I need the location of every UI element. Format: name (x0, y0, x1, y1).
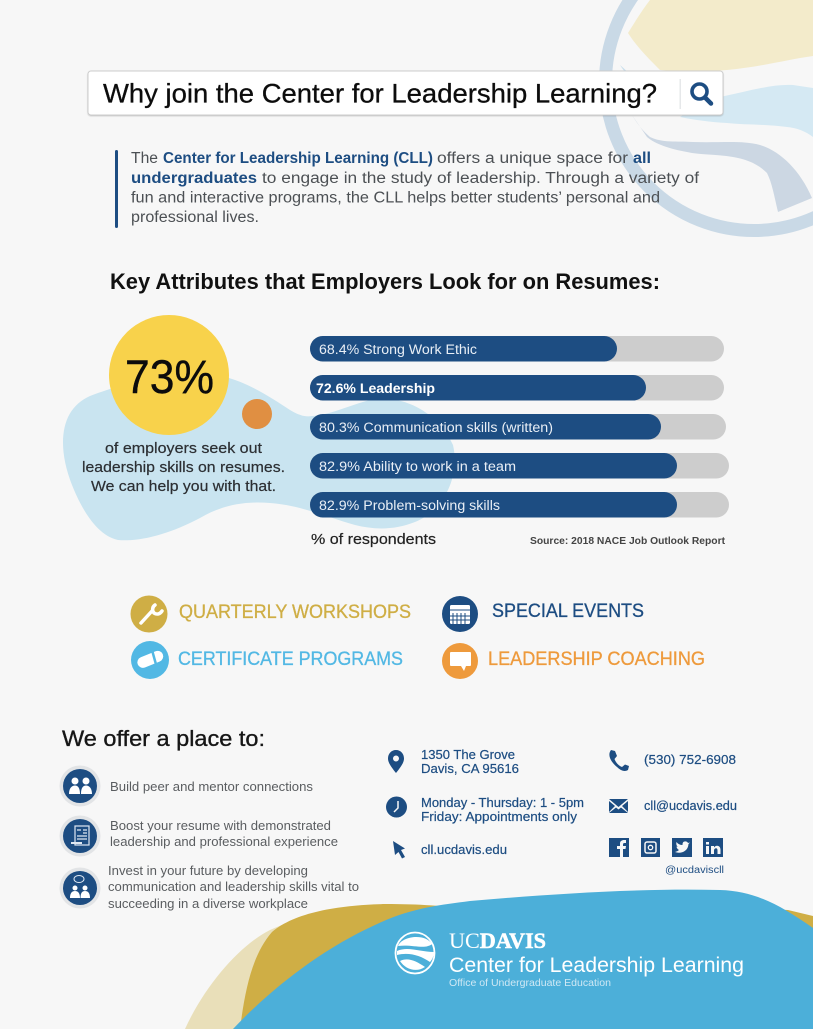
center name: Center for Leadership Learning (449, 954, 744, 977)
icon: linkedin (703, 838, 723, 857)
contact: email: cll@ucdavis.edu (644, 799, 737, 813)
icon: instagram (641, 838, 660, 857)
contact: address: 1350 The Grove (421, 748, 515, 762)
decorative logo shapes: top right (606, 0, 813, 230)
offer: invest in future (60, 864, 359, 911)
offer: peer connections: Build peer and mentor connections (110, 780, 313, 794)
blue blob background (63, 372, 455, 540)
contact: phone (609, 750, 736, 771)
contact: hours: Friday: Appointments only (421, 810, 578, 824)
intro paragraph: fun and interactive programs, the CLL helps better students’ personal and (131, 190, 660, 206)
contact: hours: Monday - Thursday: 1 - 5pm (421, 796, 584, 810)
stat caption: leadership skills on resumes. (82, 460, 285, 476)
program: special events: SPECIAL EVENTS (492, 601, 644, 622)
heading: key attributes: Key Attributes that Employers Look for on Resumes: (110, 269, 660, 294)
intro paragraph: Center for Leadership Learning (CLL) (163, 150, 433, 167)
offer: invest in future: succeeding in a diverse workplace (108, 897, 308, 911)
icon: UC Davis seal (396, 932, 434, 974)
contact: phone: (530) 752-6908 (644, 753, 736, 767)
icon: twitter (672, 838, 692, 857)
icon: magnifying glass (692, 84, 711, 104)
contact: website (393, 841, 507, 858)
office name: Office of Undergraduate Education (449, 978, 611, 989)
stat: 73 percent (109, 315, 229, 435)
offer: peer connections (60, 766, 313, 806)
bar: communication (310, 414, 726, 440)
wordmark: UCDAVIS (449, 928, 546, 953)
contact: website: cll.ucdavis.edu (421, 843, 507, 857)
contact: hours (386, 796, 584, 824)
footer waves (185, 890, 813, 1029)
intro paragraph: The (131, 150, 158, 167)
stat: 73 percent: 73% (125, 350, 214, 403)
program: leadership coaching (442, 643, 705, 679)
orange dot (242, 399, 272, 429)
intro paragraph: to engage in the study of leadership. Through a variety of (262, 170, 700, 187)
contact: address (388, 748, 519, 776)
stat caption: of employers seek out (105, 441, 262, 457)
bar: teamwork (310, 453, 729, 478)
axis label: % of respondents (311, 531, 436, 548)
offer: resume (60, 816, 338, 856)
program: quarterly workshops (130, 596, 411, 632)
offer: invest in future: communication and leadership skills vital to (108, 880, 359, 894)
social handle: @ucdaviscll (665, 865, 724, 876)
bar: problem solving: 82.9% Problem-solving skills (319, 498, 500, 513)
title: Why join the Center for Leadership Learning? (103, 78, 657, 108)
stat caption: We can help you with that. (91, 479, 276, 495)
footer logo (396, 928, 744, 989)
intro paragraph: all (633, 150, 651, 167)
program: special events (442, 596, 644, 632)
program: leadership coaching: LEADERSHIP COACHING (488, 649, 705, 670)
stat caption (82, 441, 285, 495)
program: certificate programs: CERTIFICATE PROGRAMS (178, 649, 403, 670)
social icons (609, 838, 724, 876)
source note: Source: 2018 NACE Job Outlook Report (530, 535, 725, 547)
offer: resume: leadership and professional experience (110, 835, 338, 849)
bar: teamwork: 82.9% Ability to work in a team (319, 459, 516, 474)
bar: communication: 80.3% Communication skills (written) (319, 420, 553, 435)
search bar title (88, 71, 723, 115)
intro paragraph: undergraduates (131, 170, 257, 187)
intro paragraph (115, 150, 700, 228)
intro paragraph: professional lives. (131, 209, 259, 226)
offer: resume: Boost your resume with demonstrated (110, 819, 331, 833)
icon: facebook (609, 838, 629, 857)
bar: problem solving (310, 492, 729, 518)
program: quarterly workshops: QUARTERLY WORKSHOPS (179, 602, 411, 623)
contact: address: Davis, CA 95616 (421, 762, 519, 776)
bar chart (310, 336, 729, 518)
bar: leadership: 72.6% Leadership (316, 381, 435, 396)
offer: invest in future: Invest in your future by developing (108, 864, 308, 878)
heading: we offer: We offer a place to: (62, 726, 265, 751)
bar: strong work ethic (310, 336, 724, 362)
program: certificate programs (131, 641, 403, 679)
bar: strong work ethic: 68.4% Strong Work Ethic (319, 342, 477, 357)
bar: leadership (310, 375, 724, 400)
intro paragraph: offers a unique space for (437, 150, 628, 167)
